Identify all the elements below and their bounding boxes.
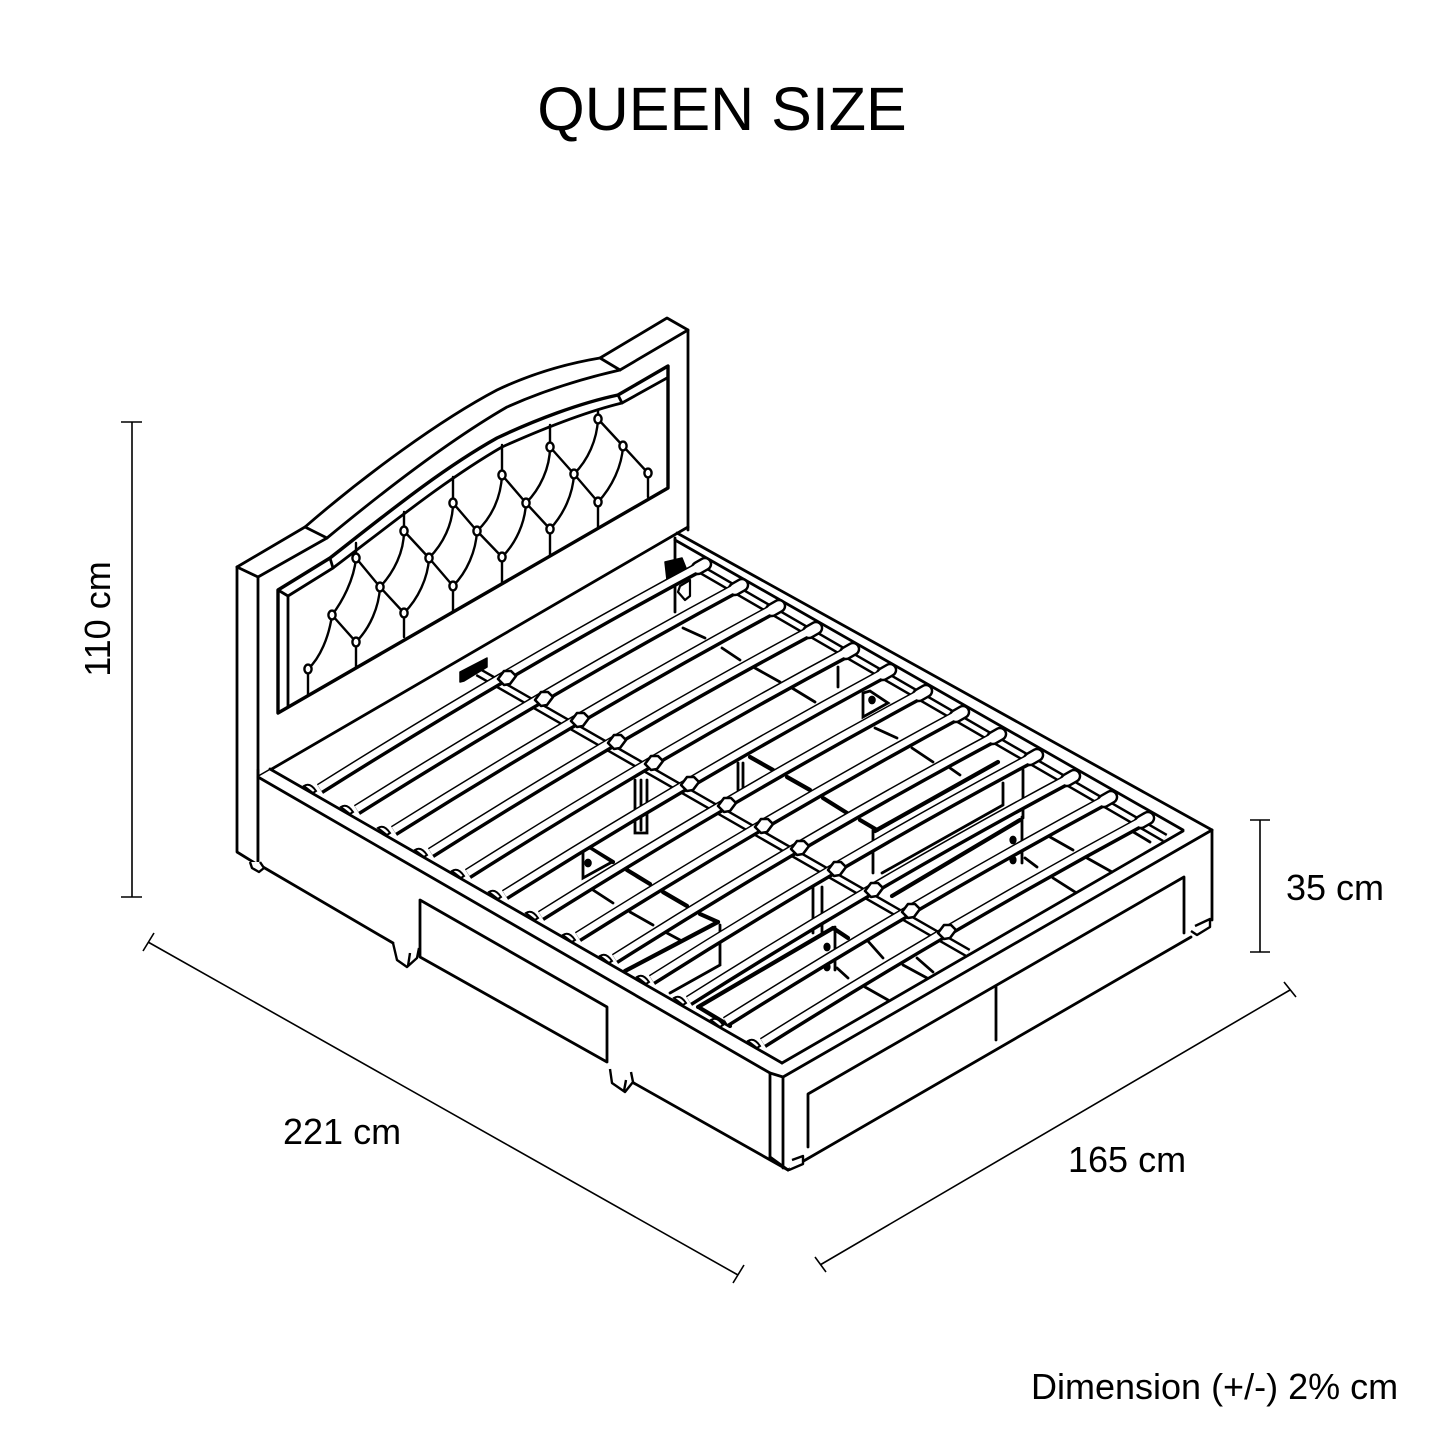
dimension: height 110 cm: 110 cm: [77, 561, 118, 677]
dark support bars: [590, 757, 1020, 1026]
dimension: width 165 cm: [815, 982, 1296, 1272]
front side rail and side face: [258, 769, 1212, 1170]
tolerance note: Dimension (+/-) 2% cm: [1031, 1366, 1398, 1407]
panel verticals: [635, 667, 1023, 993]
cross bars: [478, 566, 1165, 953]
headboard upholstered panel: [278, 366, 668, 713]
bed frame rear rails: [258, 527, 1212, 830]
curved bed slats: [320, 564, 1148, 1043]
end face with two drawers: [788, 877, 1191, 1170]
dimension: width 165 cm: 165 cm: [1068, 1139, 1186, 1180]
side drawer: [420, 900, 607, 1062]
dimension: height 35 cm: [1250, 820, 1384, 952]
dimension: height 35 cm: 35 cm: [1286, 867, 1384, 908]
slat end stubs at side rail: [304, 785, 760, 1048]
dimension: height 110 cm: [77, 422, 142, 897]
dimension: length 221 cm: [143, 933, 744, 1283]
title: QUEEN SIZE: [537, 75, 907, 143]
under-slat support structure: [583, 628, 1150, 1026]
slat clips on centre bar: [498, 671, 956, 939]
bracket with bolt: [583, 691, 1015, 970]
tufted buttons and seams: [304, 410, 652, 695]
dimension: length 221 cm: 221 cm: [283, 1111, 401, 1152]
corner posts: [770, 1073, 783, 1168]
headboard: [237, 318, 688, 865]
floor board segments: [593, 628, 1150, 1000]
mounting brackets: [460, 558, 690, 682]
bed legs: [250, 862, 1210, 1170]
